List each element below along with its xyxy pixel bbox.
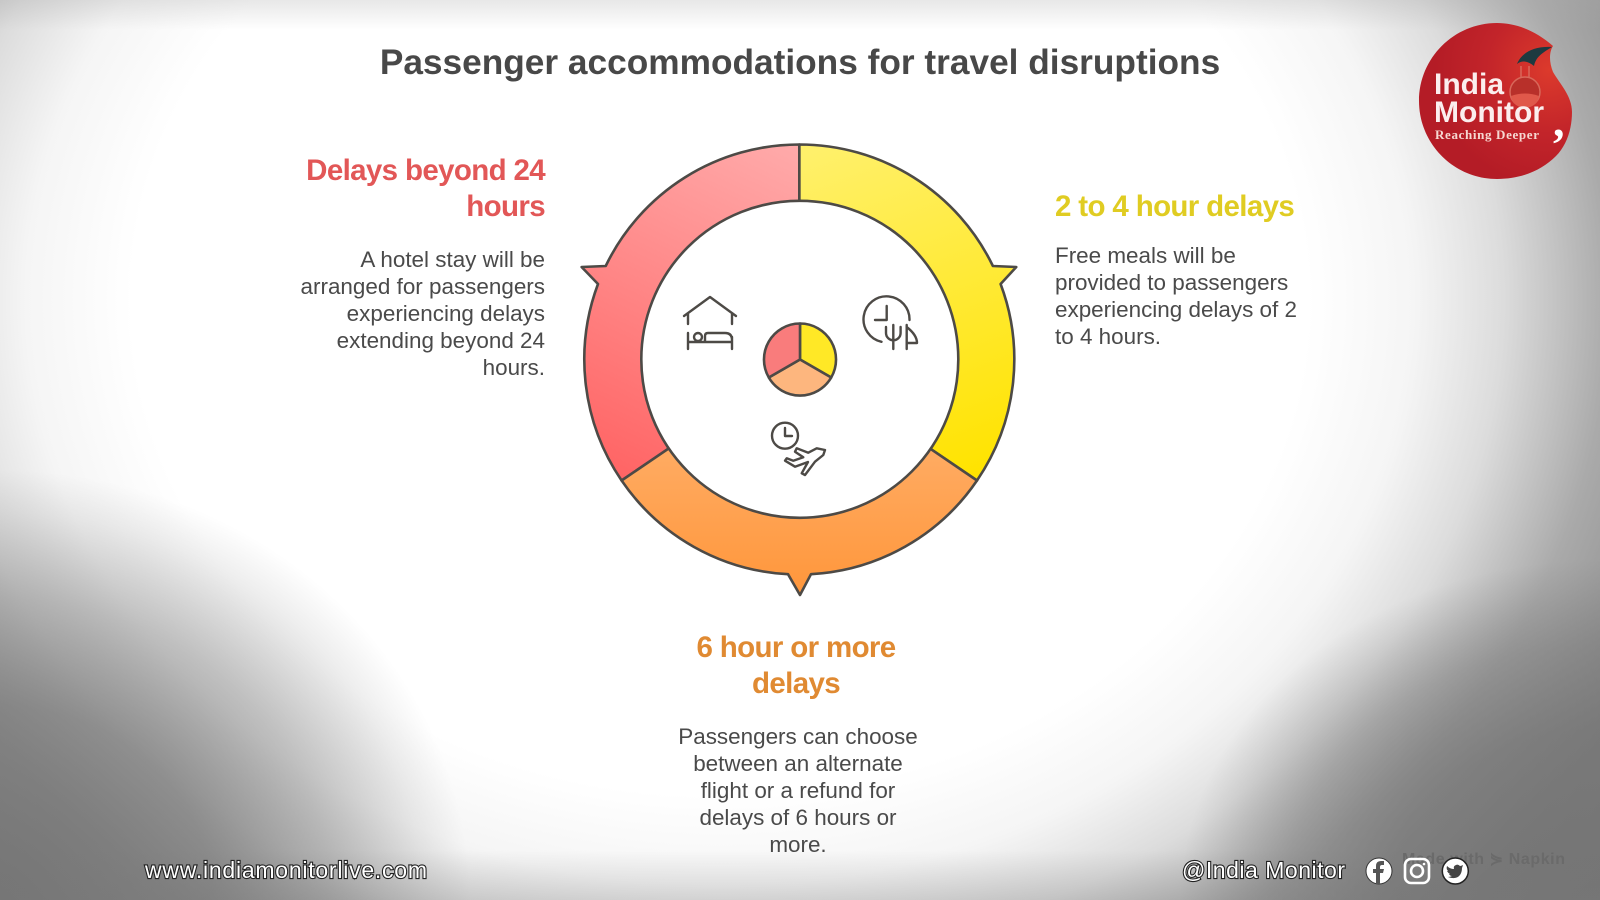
title: Passenger accommodations for travel disruptions bbox=[380, 43, 1220, 82]
panel: 6 hour or more heading: 6 hour or more bbox=[696, 631, 896, 664]
logo: India Monitor: Reaching Deeper bbox=[1435, 127, 1539, 142]
center pie bbox=[764, 324, 836, 396]
panel: 6 hour or more heading: delays bbox=[752, 667, 840, 700]
panel: delays beyond 24 hours heading: hours bbox=[466, 190, 545, 223]
panel: 6 hour or more text: delays of 6 hours or bbox=[699, 805, 897, 830]
donut diagram bbox=[582, 144, 1016, 595]
website url: www.indiamonitorlive.com bbox=[144, 857, 427, 883]
logo: India Monitor bbox=[1419, 23, 1572, 179]
watermark: made with Napkin: Made with ⋟ Napkin bbox=[1402, 851, 1565, 868]
panel: delays beyond 24 hours text: A hotel stay will be bbox=[360, 247, 545, 272]
panel: 6 hour or more heading bbox=[696, 631, 896, 700]
panel: 6 hour or more text: more. bbox=[769, 832, 827, 857]
icon: twitter bbox=[1442, 858, 1468, 884]
panel: 6 hour or more text: Passengers can choose bbox=[678, 724, 918, 749]
icon: instagram bbox=[1405, 859, 1429, 883]
logo: India Monitor: Monitor bbox=[1434, 96, 1544, 129]
panel: 2 to 4 hour delays text: Free meals will be bbox=[1055, 243, 1236, 268]
segment: orange, 6 hour or more delays bbox=[622, 360, 977, 595]
panel: delays beyond 24 hours heading bbox=[306, 154, 546, 223]
icon: clock with fork and knife bbox=[864, 296, 917, 349]
panel: delays beyond 24 hours text: extending beyond 24 bbox=[337, 328, 545, 353]
segment: yellow, 2 to 4 hour delays bbox=[799, 144, 1016, 480]
inner white circle bbox=[641, 201, 958, 518]
panel: delays beyond 24 hours heading: Delays beyond 24 bbox=[306, 154, 545, 187]
panel: 2 to 4 hour delays text: provided to passengers bbox=[1055, 270, 1288, 295]
panel: 6 hour or more text bbox=[678, 724, 918, 857]
logo: India Monitor: India bbox=[1434, 68, 1504, 101]
panel: 6 hour or more text: between an alternate bbox=[693, 751, 903, 776]
panel: 6 hour or more text: flight or a refund for bbox=[701, 778, 895, 803]
logo: India Monitor: , bbox=[1553, 95, 1564, 146]
panel: 2 to 4 hour delays heading: 2 to 4 hour delays bbox=[1055, 190, 1294, 223]
panel: delays beyond 24 hours text: arranged for passengers bbox=[301, 274, 545, 299]
panel: 2 to 4 hour delays text: to 4 hours. bbox=[1055, 324, 1161, 349]
social handle: @India Monitor bbox=[1182, 857, 1345, 883]
icon: facebook bbox=[1366, 858, 1392, 884]
panel: 2 to 4 hour delays text bbox=[1055, 243, 1297, 349]
panel: 2 to 4 hour delays text: experiencing delays of 2 bbox=[1055, 297, 1297, 322]
panel: delays beyond 24 hours text: experiencing delays bbox=[347, 301, 545, 326]
icon: clock with airplane bbox=[772, 423, 825, 475]
panel: delays beyond 24 hours text bbox=[301, 247, 545, 380]
panel: delays beyond 24 hours text: hours. bbox=[483, 355, 545, 380]
icon: house with bed bbox=[684, 297, 736, 349]
segment: red, delays beyond 24 hours bbox=[582, 144, 799, 480]
